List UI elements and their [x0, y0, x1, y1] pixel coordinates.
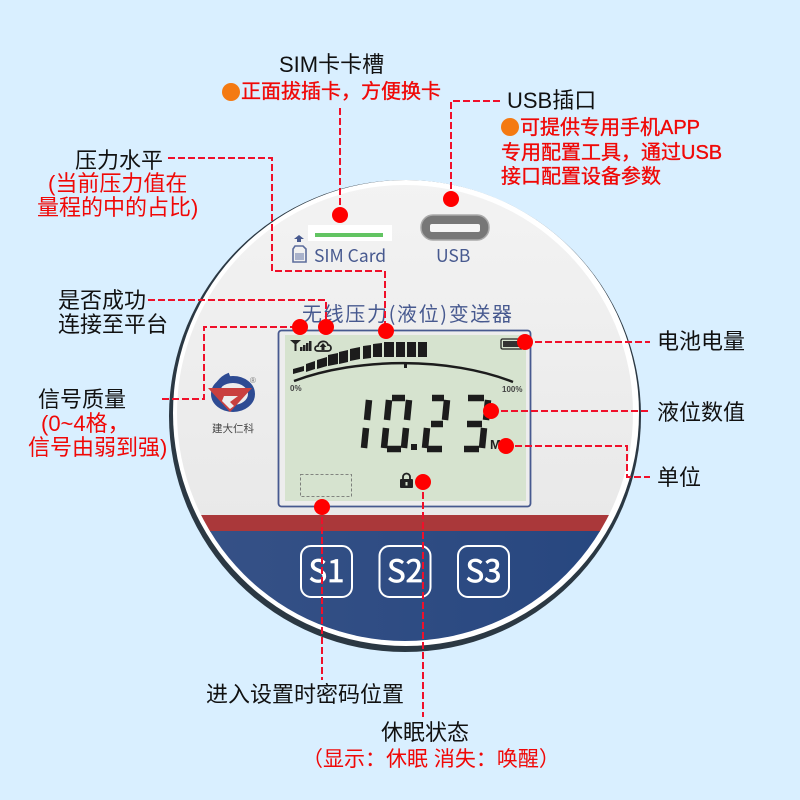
USB label: USB: [436, 243, 470, 268]
label: SIM slot: [222, 52, 441, 103]
label: level value: 液位数值: [657, 400, 745, 425]
device face: [170, 180, 640, 656]
red band: [201, 515, 609, 532]
label: sleep state: [302, 720, 560, 771]
callout dots: [292, 191, 533, 515]
logo: [208, 376, 256, 436]
label: USB port: [501, 88, 722, 188]
label: signal quality: [28, 387, 167, 460]
LCD screen: [278, 330, 530, 506]
label: platform connection: [58, 288, 168, 337]
pressure bars: [293, 342, 427, 374]
gauge arc: [294, 363, 513, 382]
button S1: [301, 546, 352, 597]
button S2: [380, 546, 430, 597]
label: password position: 进入设置时密码位置: [206, 682, 404, 707]
label: pressure level: [37, 148, 198, 220]
label: signal quality: 信号由弱到强): [28, 435, 167, 460]
lock icon: [400, 474, 413, 488]
label: platform connection: 是否成功: [58, 288, 146, 313]
password box: [300, 474, 352, 496]
SIM slot: [308, 225, 392, 241]
device rim: [169, 180, 641, 652]
label: SIM slot: SIM卡卡槽: [279, 52, 384, 77]
logo text: 建大仁科: [212, 421, 254, 436]
label: platform connection: 连接至平台: [58, 312, 168, 337]
reading: [364, 398, 488, 450]
button S3: S3: [466, 546, 501, 591]
label: sleep state: （显示：休眠 消失：唤醒）: [302, 748, 560, 771]
button S3: [458, 546, 509, 597]
label: SIM slot: 正面拔插卡，方便换卡: [241, 80, 441, 103]
SIM Card label: SIM Card: [314, 243, 386, 268]
label: USB port: 接口配置设备参数: [501, 165, 661, 188]
label: signal quality: 信号质量: [38, 387, 126, 412]
label: USB port: 专用配置工具，通过USB: [501, 141, 722, 164]
LCD screen: 100%: [502, 385, 522, 394]
button S2: S2: [387, 546, 423, 591]
callout lines: [148, 101, 650, 717]
label: signal quality: (0~4格，: [41, 411, 130, 436]
unit: M: [490, 437, 501, 452]
battery icon: [501, 339, 523, 349]
cloud icon: [315, 341, 331, 351]
USB port: [421, 215, 489, 240]
device: [169, 180, 641, 656]
label: pressure level: 量程的中的占比): [37, 195, 198, 220]
label: USB port: USB插口: [507, 88, 596, 113]
label: unit: 单位: [657, 465, 701, 490]
logo: ®: [250, 376, 256, 385]
button S1: S1: [309, 546, 344, 591]
label: USB port: 可提供专用手机APP: [520, 116, 700, 139]
label: sleep state: 休眠状态: [381, 720, 469, 745]
blue panel: [210, 531, 600, 641]
label: battery: 电池电量: [657, 329, 745, 354]
label: pressure level: 压力水平: [75, 148, 163, 173]
signal icon: [290, 340, 312, 351]
SIM card icon: [293, 235, 306, 262]
device title: 无线压力(液位)变送器: [302, 298, 512, 327]
gauge labels: 0%: [290, 384, 302, 393]
label: pressure level: (当前压力值在: [48, 171, 187, 196]
